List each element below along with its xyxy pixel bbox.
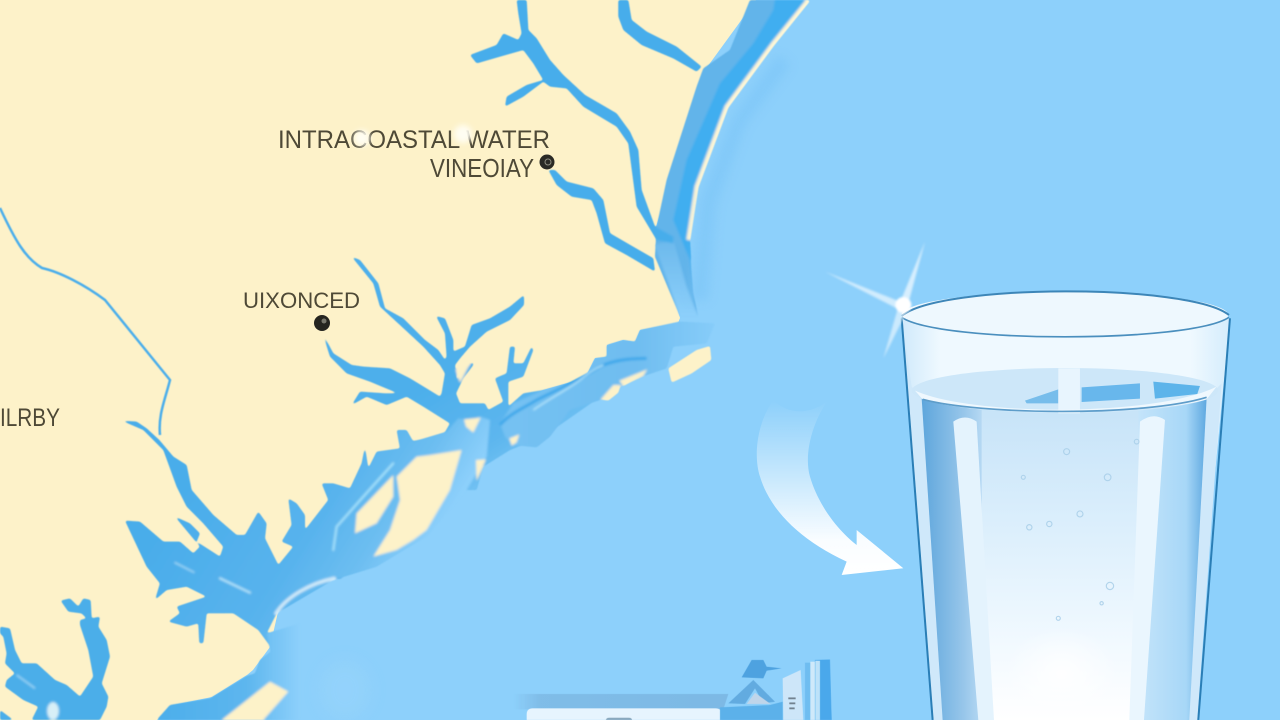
central delta islets: [456, 361, 481, 433]
marker dot: waterway: [540, 154, 554, 170]
surface shine line: [923, 397, 1207, 411]
white panel: [783, 670, 803, 720]
thin column: [805, 663, 810, 720]
lagoon bright line: [533, 365, 603, 410]
southwest inlet: [0, 598, 110, 720]
thick column: [815, 659, 832, 720]
river from waterway marker: [548, 170, 655, 272]
central delta: [323, 257, 610, 490]
bubbles: [1021, 439, 1139, 620]
water surface: [912, 368, 1218, 413]
small house figure: [728, 680, 775, 704]
channel outer band: [655, 0, 808, 317]
lower delta: [122, 417, 490, 648]
map label: uixonced: UIXONCED: [243, 288, 360, 313]
upper river one: [470, 0, 673, 243]
upper glass: [901, 318, 1230, 473]
southern island: [222, 682, 288, 720]
card detail: [606, 718, 632, 720]
curved arrow: [757, 400, 903, 575]
southwest inlet highlight: [17, 675, 35, 688]
lagoon dark channel: [500, 358, 647, 425]
lower delta islands: [175, 450, 486, 613]
coastal lagoon: [500, 322, 715, 447]
left highlight strip: [953, 417, 994, 720]
bottom glow: [1005, 627, 1118, 720]
lagoon water: [500, 322, 715, 447]
cream shoreline along channel: [688, 0, 808, 240]
west highlight: [220, 578, 250, 593]
barrier spit: [276, 578, 334, 613]
main coastal channel group: [470, 0, 808, 317]
offshore fade: [319, 660, 371, 720]
left glass edge: [902, 318, 933, 720]
map label: intracoastal water: INTRACOASTAL WATER: [278, 126, 550, 154]
map label: ilrby: ILRBY: [0, 404, 60, 432]
middle island west: [601, 385, 621, 401]
blue base block: [720, 702, 783, 720]
figure top: [742, 660, 782, 678]
label glare: [354, 125, 472, 146]
column gap: [810, 662, 815, 720]
surface band one: [1025, 389, 1058, 403]
upper river two: [618, 0, 702, 72]
land mass: [0, 0, 756, 720]
channel foot: [655, 240, 698, 317]
middle island east: [619, 369, 647, 386]
delta highlight: [333, 463, 393, 550]
spit tail: [337, 578, 365, 586]
far southwest water: [0, 710, 13, 720]
right highlight strip: [1129, 416, 1165, 720]
bottom document widget: [513, 659, 832, 720]
widget shadow band: [513, 694, 728, 709]
coastal waters and rivers: [0, 0, 808, 720]
water left band: [922, 398, 982, 720]
thin western river: [0, 208, 170, 435]
rim interior: [902, 292, 1228, 338]
southern sound: [157, 623, 300, 720]
water centre: [973, 403, 1143, 720]
right wall strip: [1188, 383, 1222, 720]
map label: waterway: VINEOIAY: [430, 153, 534, 183]
eastern islet: [476, 459, 486, 481]
surface band three: [1153, 382, 1200, 399]
right glass edge: [1198, 318, 1230, 720]
far west highlight: [175, 563, 194, 572]
water glass: [901, 291, 1230, 720]
tiny islet: [509, 434, 519, 446]
marker dot: uixonced: [314, 315, 330, 331]
rim top stroke: [902, 291, 1229, 316]
surface light column: [1058, 368, 1080, 413]
white card: [527, 708, 722, 720]
water right band: [1138, 398, 1207, 720]
surface band two: [1082, 383, 1140, 402]
sparkle on glass rim: [825, 242, 925, 358]
nearshore shading: [690, 55, 790, 300]
narrow sliver: [355, 475, 393, 533]
column light: [815, 661, 820, 720]
outer island: [668, 346, 711, 383]
southwest islet: [47, 702, 59, 720]
house gable: [747, 693, 771, 704]
channel inner bright band: [673, 0, 808, 293]
rim bottom stroke: [902, 317, 1229, 337]
large island: [373, 450, 462, 557]
panel marks: [788, 698, 796, 708]
surface front lip: [915, 387, 1217, 412]
left wall strip: [903, 327, 945, 720]
